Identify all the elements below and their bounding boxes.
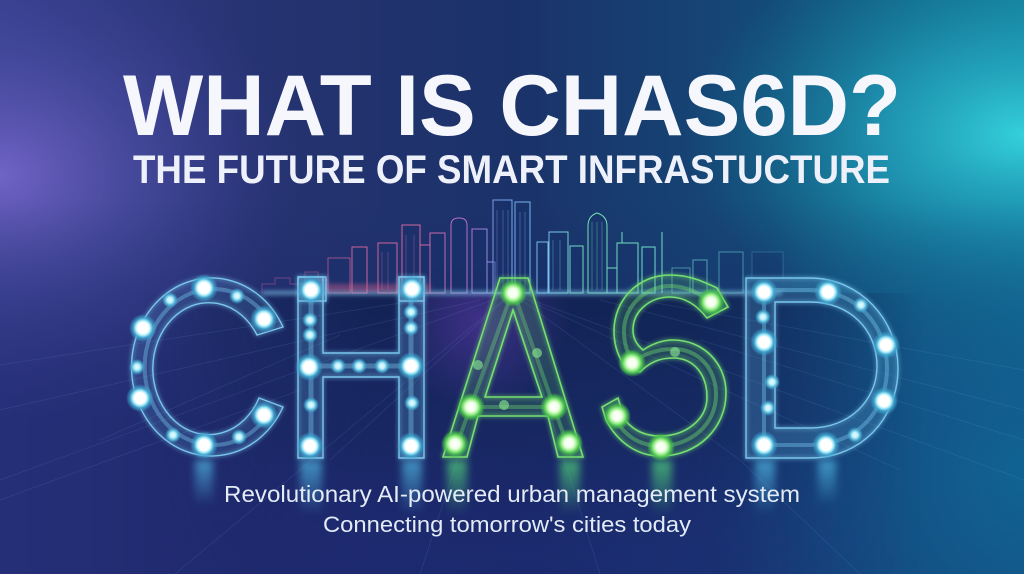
letter H (295, 275, 426, 460)
main title: WHAT IS CHAS6D? (123, 58, 901, 154)
letter D (746, 278, 900, 459)
perspective floor grid (0, 293, 1024, 574)
subtitle: THE FUTURE OF SMART INFRASTUCTURE (133, 148, 890, 192)
tagline: Connecting tomorrow's cities today (323, 512, 691, 537)
horizon glow (262, 284, 782, 295)
letter C (126, 274, 283, 459)
tagline (224, 481, 800, 537)
city skyline (262, 200, 783, 293)
letter A (441, 278, 583, 458)
tagline: Revolutionary AI-powered urban management system (224, 481, 800, 507)
letter S (602, 275, 728, 461)
letter reflections (195, 460, 836, 515)
